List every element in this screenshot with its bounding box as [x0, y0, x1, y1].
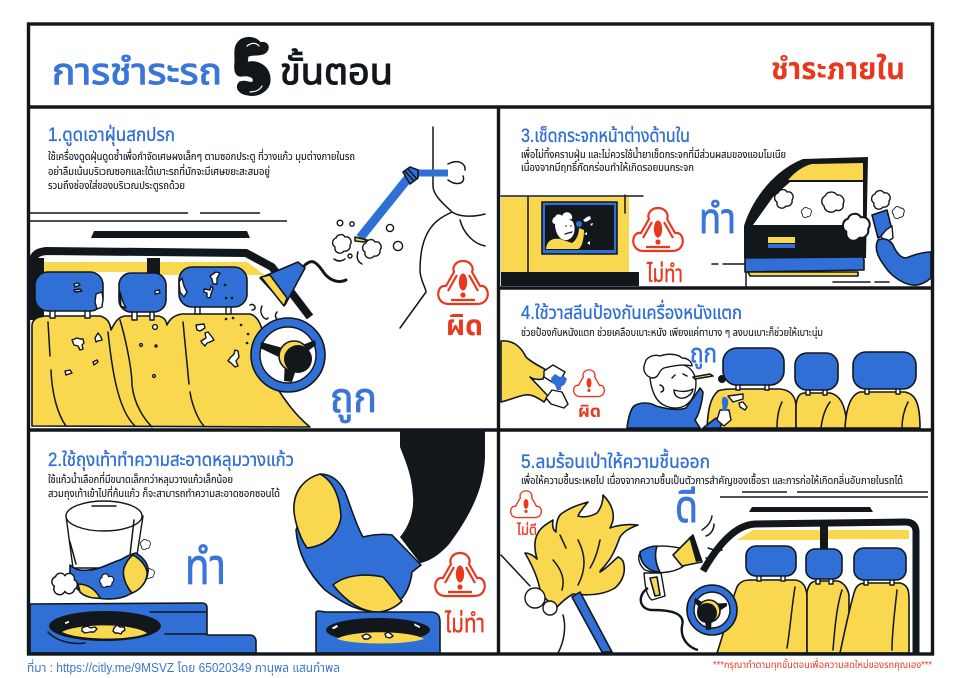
title: ขั้นตอน: [280, 48, 393, 92]
icon: warning: [438, 261, 488, 304]
heading: step 4: 4.ใช้วาสลีนป้องกันเครื่องหนังแตก: [521, 299, 742, 324]
icon: warning: [435, 553, 485, 596]
panel: step 2 clean cup holder: [30, 431, 485, 653]
hair dryer: [639, 516, 722, 650]
yellow car side with window: [501, 195, 643, 286]
heading: step 5: 5.ลมร้อนเป่าให้ความชื้นออก: [521, 448, 710, 473]
car door and window: [712, 157, 904, 286]
arm with sock, wrong: [294, 431, 485, 612]
text: step 3 description: เพื่อไม่ทิ้งคราบฝุ่น และไม่ควรใช้น้ำยาเช็ดกระจกที่มีส่วนผสมของแอมโมเนีย: [521, 146, 786, 161]
text: step 2 description: สวมถุงเท้าเข้าไปที่ก้นแก้ว ก็จะสามารถทำความสะอาดซอกซอนได้: [48, 485, 280, 500]
source credit: ที่มา : https://citly.me/9MSVZ โดย 65020349 ภานุพล แสนกำพล: [27, 659, 340, 675]
text: step 4 description: ช่วยป้องกันหนังแตก ช่วยเคลือบเบาะหนัง เพียงแค่ทาบาง ๆ ลงบนเบาะก็ช่วยให้เบาะนุ่ม: [521, 326, 823, 339]
icon: steering wheel: [251, 318, 325, 392]
footer note: ***กรุณาทำตามทุกขั้นตอนเพื่อความสดใหม่ของรถคุณเอง***: [713, 657, 932, 671]
icon: balloon number five: [236, 38, 269, 94]
person wiping inside window: [546, 212, 593, 249]
panel: step 3 wipe windshield: [501, 124, 931, 288]
panel: step 1 vacuum: [30, 124, 488, 427]
label: wrong: ผิด: [446, 310, 483, 341]
label: good: ดี: [675, 481, 698, 532]
panel: step 4 vaseline: [501, 299, 920, 428]
counter with cup holder, correct: [30, 603, 256, 653]
label: do: ทำ: [185, 539, 226, 595]
text: step 1 description: อย่าลืมเน้นบริเวณซอกและใต้เบาะรถที่มักจะมีเศษขยะสะสมอยู่: [48, 163, 270, 178]
label: wrong: ผิด: [578, 402, 601, 421]
label: do not: ไม่ทำ: [444, 608, 485, 638]
sock-wrapped glass: [52, 501, 154, 599]
dust clouds: [333, 220, 403, 264]
arm with cloth: [872, 210, 931, 285]
label: not good: ไม่ดี: [516, 521, 537, 539]
text: step 1 description: รวมถึงช่องใส่ของบริเวณประตูรถด้วย: [48, 179, 185, 192]
dirt specks: [65, 272, 239, 377]
hand with vaseline jar on seat: [703, 394, 747, 428]
title: [52, 38, 393, 94]
person applying vaseline: [627, 354, 726, 428]
text: step 1 description: [48, 148, 355, 192]
icon: warning: [633, 208, 683, 251]
text: step 1 description: ใช้เครื่องดูดฝุ่นดูดซ้ำเพื่อกำจัดเศษผงเล็กๆ ตามซอกประตู ที่วางแก้ว มุมต่างภายในรถ: [48, 148, 355, 163]
subtitle: interior cleaning: ชำระภายใน: [771, 53, 905, 86]
icon: steering wheel: [687, 585, 737, 635]
text: step 2 description: [48, 471, 280, 500]
hands with vaseline, wrong: [501, 341, 568, 408]
vacuum wand and hand: [355, 127, 485, 328]
headrests: [35, 267, 247, 320]
label: correct: ถูก: [690, 338, 717, 369]
counter with hole, wrong: [316, 611, 440, 653]
yellow seats and headrests: [707, 348, 920, 428]
icon: balloon number five: 5: [254, 81, 255, 83]
foam clouds on window: [775, 190, 904, 241]
panel: step 5 hot air: [501, 448, 928, 654]
car interior with dirty seats: [30, 213, 310, 427]
icon: warning: [574, 370, 604, 397]
text: step 5 description: เพื่อให้ความชื้นระเหยไป เนื่องจากความชื้นเป็นตัวการสำคัญของเชื้อรา และการก่อให้เกิดกลิ่นอับภายในรถได้: [521, 472, 903, 487]
label: do: ทำ: [699, 195, 736, 242]
label: correct: ถูก: [330, 375, 377, 423]
heading: step 1: 1.ดูดเอาฝุ่นสกปรก: [48, 124, 175, 147]
icon: warning: [511, 491, 541, 518]
header: [52, 38, 905, 94]
car interior seats: [703, 492, 928, 654]
text: step 3 description: [521, 146, 786, 174]
vacuum cleaner with hose: [260, 262, 346, 306]
heading: step 2: 2.ใช้ถุงเท้าทำความสะอาดหลุมวางแก้ว: [48, 448, 294, 471]
title: การชำระรถ: [52, 51, 222, 92]
text: step 3 description: เนื่องจากมีฤทธิ์กัดกร่อนทำให้เกิดรอยบนกระจก: [521, 159, 694, 174]
heading: step 3: 3.เช็ดกระจกหน้าต่างด้านใน: [521, 124, 690, 147]
flame torch, not good: [501, 495, 638, 653]
text: step 2 description: ใช้แก้วน้ำเลือกที่มีขนาดเล็กกว่าหลุมวางแก้วเล็กน้อย: [48, 471, 233, 486]
label: do not: ไม่ทำ: [646, 260, 683, 288]
